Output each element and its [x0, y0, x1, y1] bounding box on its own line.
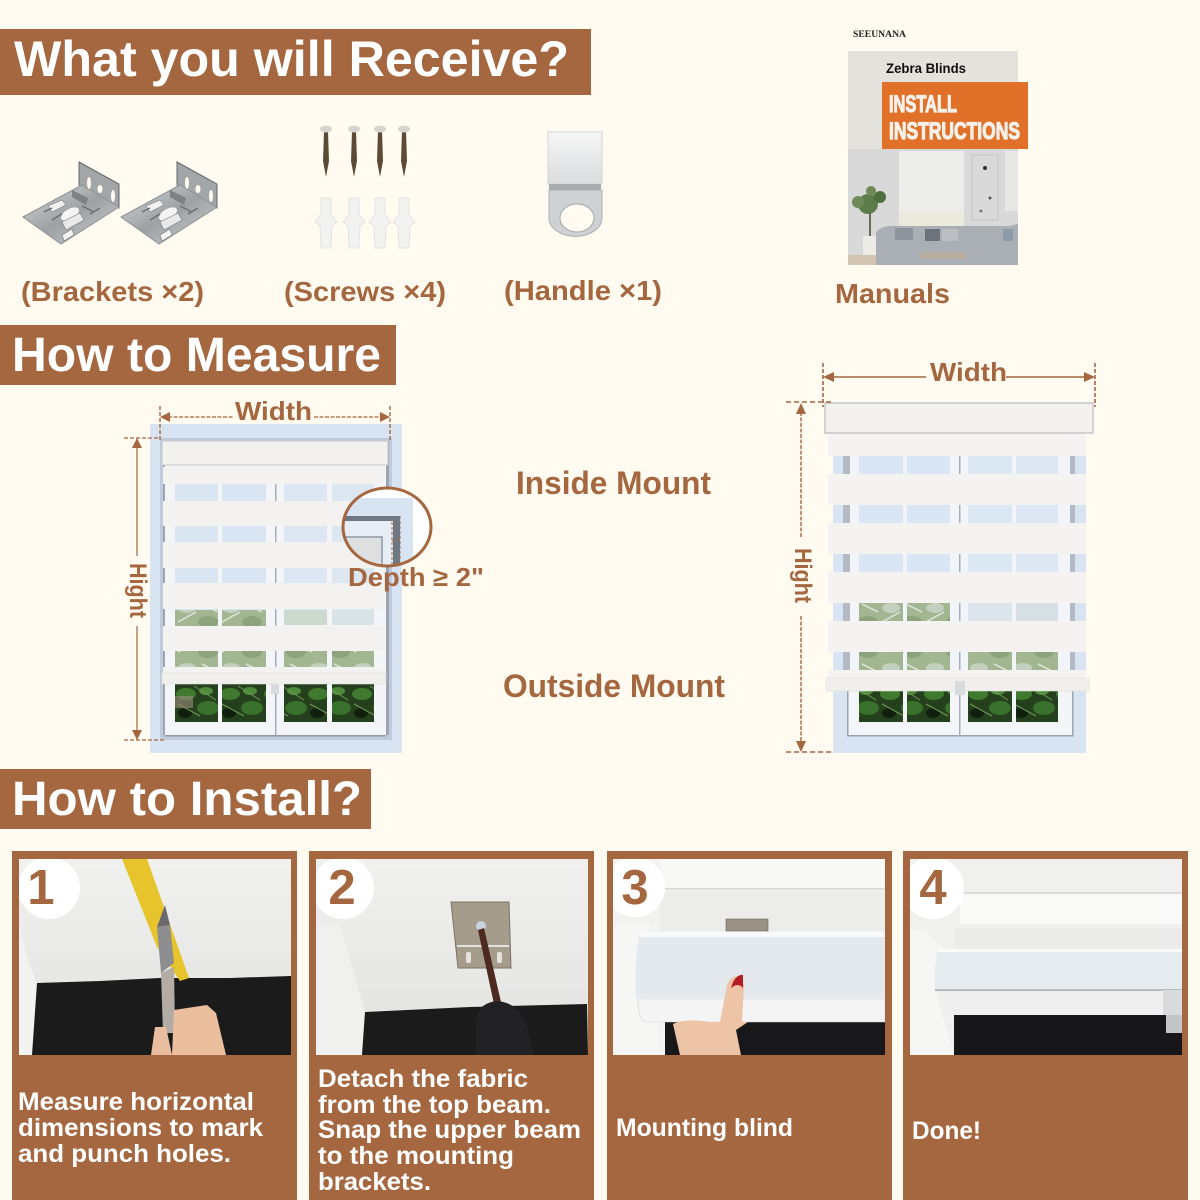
dimension: width [823, 357, 1095, 407]
heading: What you will Receive: What you will Receive? [14, 31, 569, 87]
number badge 4 [910, 859, 964, 919]
panel: step 1 [12, 851, 297, 1200]
photo: mounting the blind [605, 857, 885, 1055]
icon: handle [548, 132, 602, 236]
label: manuals: Manuals [835, 278, 950, 309]
dimension: height: Hight [124, 563, 151, 618]
label: brackets: (Brackets ×2) [21, 276, 204, 307]
step 2 text: from the top beam. [318, 1091, 551, 1119]
label: inside mount: Inside Mount [516, 465, 711, 501]
step 2 text: Snap the upper beam [318, 1116, 581, 1144]
step 1 text: Measure horizontal [18, 1088, 254, 1116]
step 1 text [18, 1088, 263, 1168]
manual title: Zebra Blinds [886, 61, 966, 76]
step 3 text: Mounting blind [616, 1114, 793, 1142]
label: depth: Depth ≥ 2" [348, 562, 484, 592]
number badge 4: 4 [919, 861, 947, 915]
panel: step 4 [902, 851, 1188, 1200]
brand name: SEEUNANA [853, 30, 906, 40]
window frame [833, 456, 1086, 753]
diagram: outside mount window [786, 357, 1095, 753]
dimension: width: Width [235, 396, 312, 426]
step 2 text: brackets. [318, 1168, 431, 1196]
step 1 text: and punch holes. [18, 1140, 231, 1168]
number badge 2 [312, 857, 374, 919]
number badge 3: 3 [621, 861, 649, 915]
inset: depth detail [342, 488, 431, 568]
step 2 text: Detach the fabric [318, 1065, 528, 1093]
orange banner: INSTALL [889, 91, 957, 118]
icon: brackets pair [23, 162, 217, 244]
diagram: inside mount window [124, 396, 484, 753]
photo: finished install [902, 857, 1182, 1055]
panel: step 3 [605, 851, 892, 1200]
dimension: height [786, 402, 834, 752]
label: screws: (Screws ×4) [284, 276, 446, 307]
window panes [859, 456, 1058, 722]
dimension: height: Hight [789, 548, 816, 603]
window frame [150, 424, 402, 753]
orange banner: INSTRUCTIONS [889, 118, 1020, 145]
number badge 1 [18, 857, 80, 919]
step 4 text: Done! [912, 1117, 981, 1145]
manual cover [848, 30, 1028, 265]
step 2 text [318, 1065, 581, 1196]
photo: marking with tape and pen [18, 857, 291, 1055]
icon: screws and wall anchors [315, 126, 415, 248]
orange banner [882, 82, 1028, 149]
dimension: width: Width [930, 357, 1007, 387]
window panes [175, 484, 374, 722]
dimension: width [160, 396, 390, 442]
panel: step 2 [309, 851, 594, 1200]
zebra blind [162, 441, 388, 694]
dimension: height [124, 438, 165, 740]
number badge 3 [613, 859, 665, 917]
step 2 text: to the mounting [318, 1142, 514, 1170]
label: outside mount: Outside Mount [503, 668, 725, 704]
heading: How to Measure: How to Measure [12, 329, 381, 382]
label: handle: (Handle ×1) [504, 275, 662, 306]
manual photo: living room [848, 149, 1018, 265]
step 1 text: dimensions to mark [18, 1114, 263, 1142]
number badge 1: 1 [27, 861, 55, 915]
photo: drilling the bracket [312, 857, 588, 1055]
number badge 2: 2 [328, 861, 356, 915]
zebra blind [825, 403, 1093, 695]
heading: How to Install: How to Install? [12, 773, 362, 826]
